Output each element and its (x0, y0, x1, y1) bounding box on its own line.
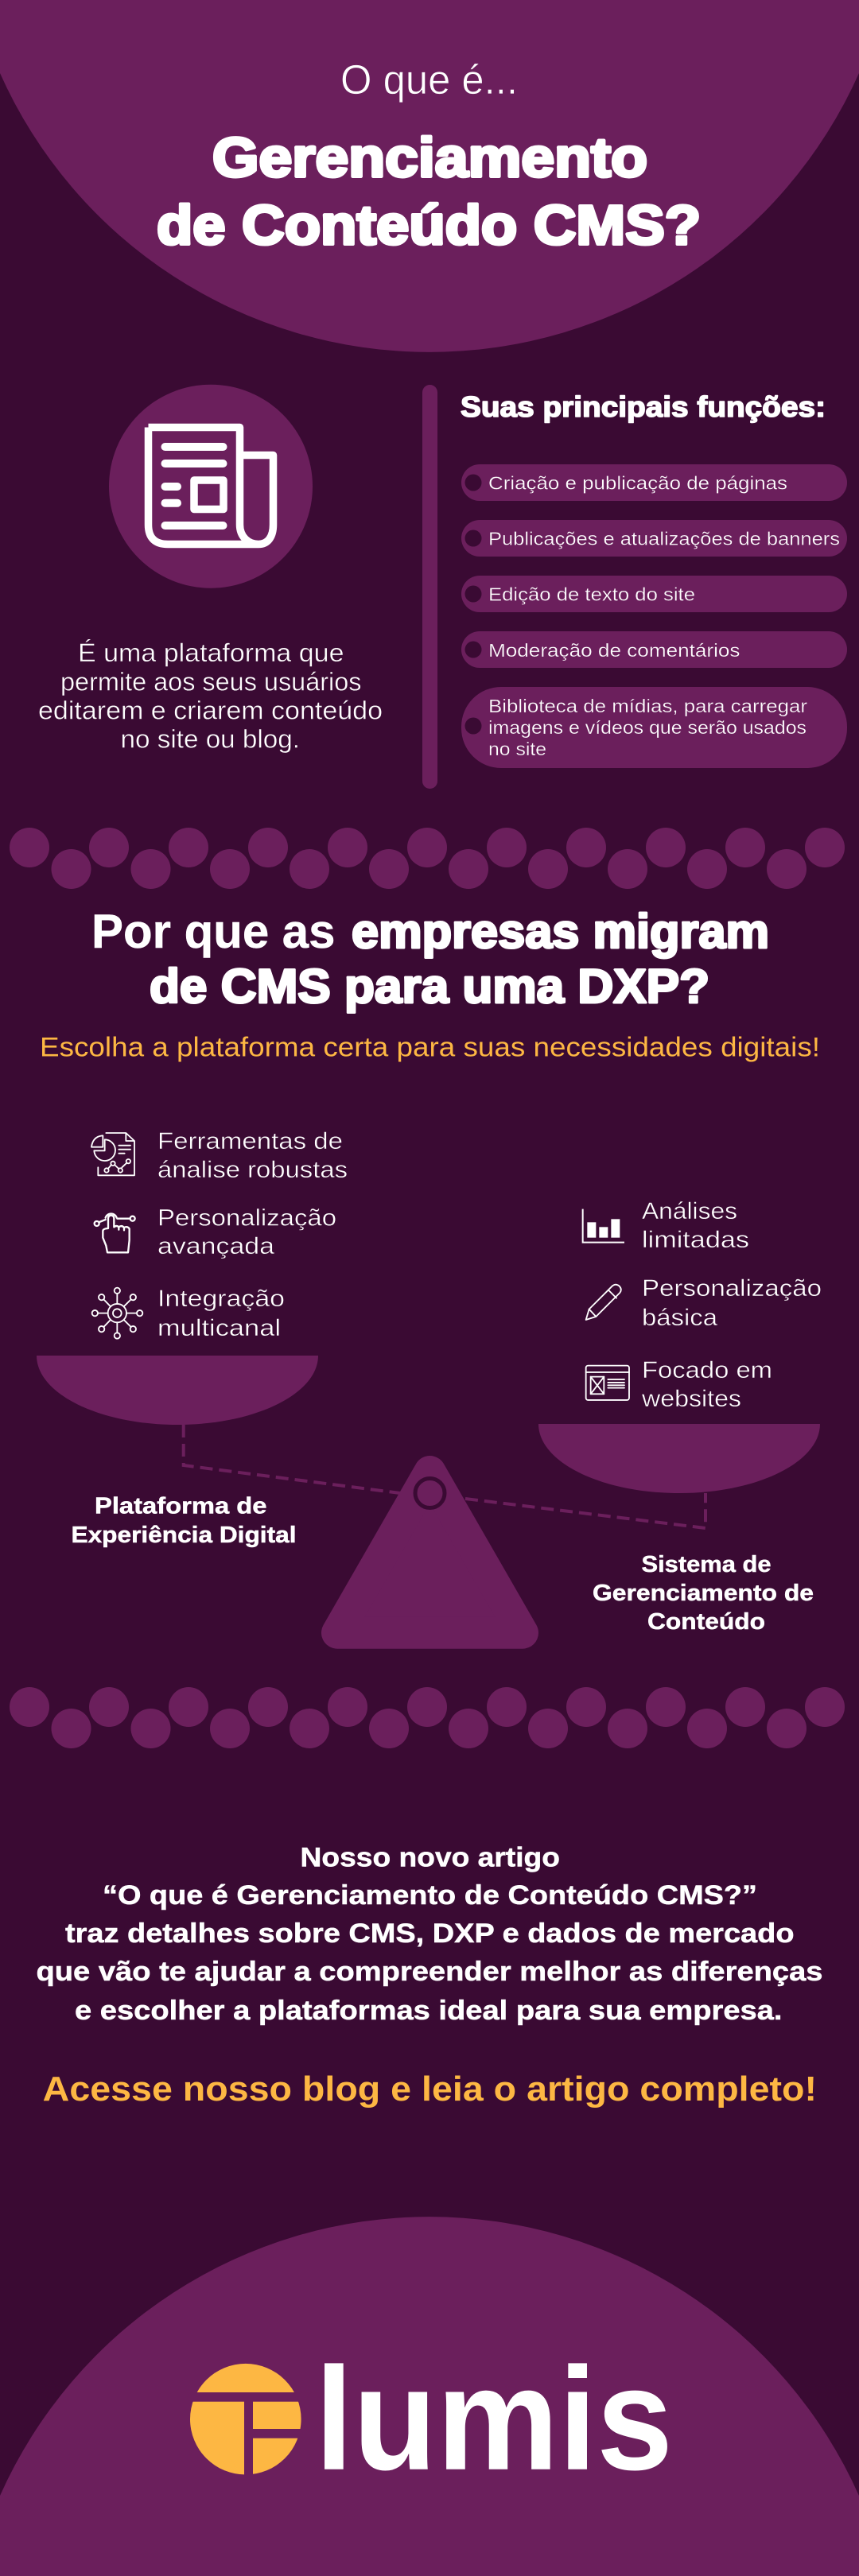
orange subheading: Escolha a plataforma certa para suas necessidades digitais! (40, 1032, 820, 1062)
feature text (157, 1286, 285, 1341)
dotted divider 2 (10, 1687, 845, 1748)
label: CMS: Conteúdo (647, 1609, 765, 1635)
function item 5: Biblioteca de mídias, para carregar (488, 696, 807, 716)
scale pan left (37, 1356, 318, 1425)
function item 3: Edição de texto do site (488, 584, 695, 605)
feature text (157, 1128, 348, 1183)
function item 5 (461, 687, 847, 768)
icon: hand pointer (95, 1214, 135, 1252)
label: CMS: Gerenciamento de (593, 1581, 814, 1606)
function item 3 (461, 576, 847, 612)
label: DXP (72, 1493, 296, 1548)
scale dashed beam (184, 1425, 705, 1528)
function item 4 (461, 631, 847, 668)
footer semicircle (0, 2217, 859, 2576)
section heading: why migrate: empresas migram (352, 905, 769, 958)
feature text: limitadas (642, 1227, 749, 1253)
scale pan right (538, 1424, 820, 1493)
function item 2 (461, 520, 847, 557)
balance scale (37, 1356, 820, 1633)
panel: main functions (461, 390, 847, 768)
list: DXP features (91, 1128, 348, 1341)
icon: newspaper in circle (109, 385, 313, 588)
description text: permite aos seus usuários (60, 668, 361, 696)
feature text (157, 1205, 336, 1259)
description text: editarem e criarem conteúdo (38, 696, 383, 725)
icon: multichannel network (92, 1288, 142, 1339)
feature text: básica (642, 1305, 717, 1331)
logo mark (189, 2363, 302, 2476)
header semicircle (0, 0, 859, 352)
icon: bar chart (583, 1209, 624, 1243)
lumis logo (190, 2363, 667, 2474)
article paragraph: que vão te ajudar a compreender melhor as diferenças (37, 1957, 822, 1987)
label: DXP: Experiência Digital (72, 1523, 296, 1548)
function item 2: Publicações e atualizações de banners (488, 528, 840, 549)
feature text: Análises (642, 1198, 737, 1224)
scale pivot (415, 1479, 445, 1507)
feature text (641, 1357, 772, 1412)
label: CMS (593, 1552, 814, 1635)
description text (38, 638, 383, 754)
feature text: websites (641, 1386, 741, 1412)
feature text: Focado em (642, 1357, 772, 1383)
description text: no site ou blog. (121, 725, 300, 754)
icon: analytics report (91, 1133, 134, 1175)
article paragraph: “O que é Gerenciamento de Conteúdo CMS?” (103, 1880, 757, 1911)
list: CMS features (583, 1198, 822, 1412)
article paragraph: Nosso novo artigo (301, 1843, 560, 1873)
function item 5: no site (488, 739, 546, 759)
scale base (337, 1472, 523, 1633)
feature text: multicanal (157, 1315, 281, 1341)
function item 1: Criação e publicação de páginas (488, 472, 787, 493)
feature text: ánalise robustas (157, 1157, 348, 1183)
icon: pencil (586, 1285, 621, 1320)
feature text: Ferramentas de (157, 1128, 343, 1154)
vertical divider bar (422, 385, 437, 789)
article paragraph (37, 1843, 822, 2026)
article paragraph: e escolher a plataformas ideal para sua empresa. (75, 1996, 783, 2026)
feature text: avançada (157, 1233, 274, 1259)
feature text: Integração (157, 1286, 285, 1312)
main title: de Conteúdo CMS? (157, 194, 701, 256)
feature text: Personalização (642, 1275, 822, 1302)
label: DXP: Plataforma de (95, 1493, 267, 1519)
main title: Gerenciamento (212, 126, 647, 188)
logo wordmark: lumis (315, 2337, 673, 2500)
icon: website window (586, 1366, 629, 1400)
function item 1 (461, 464, 847, 501)
header: title block (157, 57, 701, 256)
label: CMS: Sistema de (641, 1552, 772, 1577)
feature text (642, 1275, 822, 1331)
kicker: O que é... (340, 57, 518, 103)
feature text (642, 1198, 749, 1253)
section heading: why migrate: de CMS para uma DXP? (150, 960, 709, 1013)
function item 5: imagens e vídeos que serão usados (488, 717, 807, 738)
section heading: why migrate (91, 905, 769, 1013)
article paragraph: traz detalhes sobre CMS, DXP e dados de mercado (65, 1918, 794, 1949)
main title (157, 126, 701, 256)
panel: what it is (38, 385, 383, 754)
call to action: Acesse nosso blog e leia o artigo completo! (43, 2070, 817, 2109)
feature text: Personalização (157, 1205, 336, 1232)
dotted divider 1 (10, 828, 845, 889)
functions heading: Suas principais funções: (461, 390, 826, 423)
section heading: why migrate: Por que as (91, 905, 336, 958)
function item 4: Moderação de comentários (488, 640, 740, 661)
description text: É uma plataforma que (78, 638, 344, 667)
